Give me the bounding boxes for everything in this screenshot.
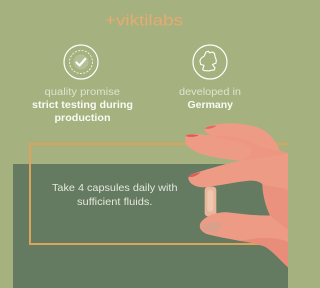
text block: quality promise: quality promise xyxy=(44,87,120,98)
text block: strict testing during production: strict testing during xyxy=(32,100,133,111)
text block: dosage instruction xyxy=(52,183,178,208)
text block: Germany: Germany xyxy=(188,100,233,111)
capsule xyxy=(205,187,216,216)
hand body xyxy=(185,123,288,267)
finger shading xyxy=(212,135,288,161)
panel: dark green instructions background xyxy=(13,164,288,288)
panel: orange outline frame xyxy=(30,144,300,244)
title: viktilabs logo: +viktilabs xyxy=(105,12,183,30)
text block: developed in: developed in xyxy=(179,87,241,98)
fingernails xyxy=(205,126,217,129)
text block: dosage instruction: sufficient fluids. xyxy=(77,197,152,208)
hand holding a capsule xyxy=(185,123,288,267)
icon: Germany map outline xyxy=(193,45,227,79)
text block: dosage instruction: Take 4 capsules daily with xyxy=(52,183,178,194)
icon: quality seal with check mark xyxy=(64,45,98,79)
text block: strict testing during production xyxy=(32,100,133,124)
text block: strict testing during production: production xyxy=(54,113,110,124)
